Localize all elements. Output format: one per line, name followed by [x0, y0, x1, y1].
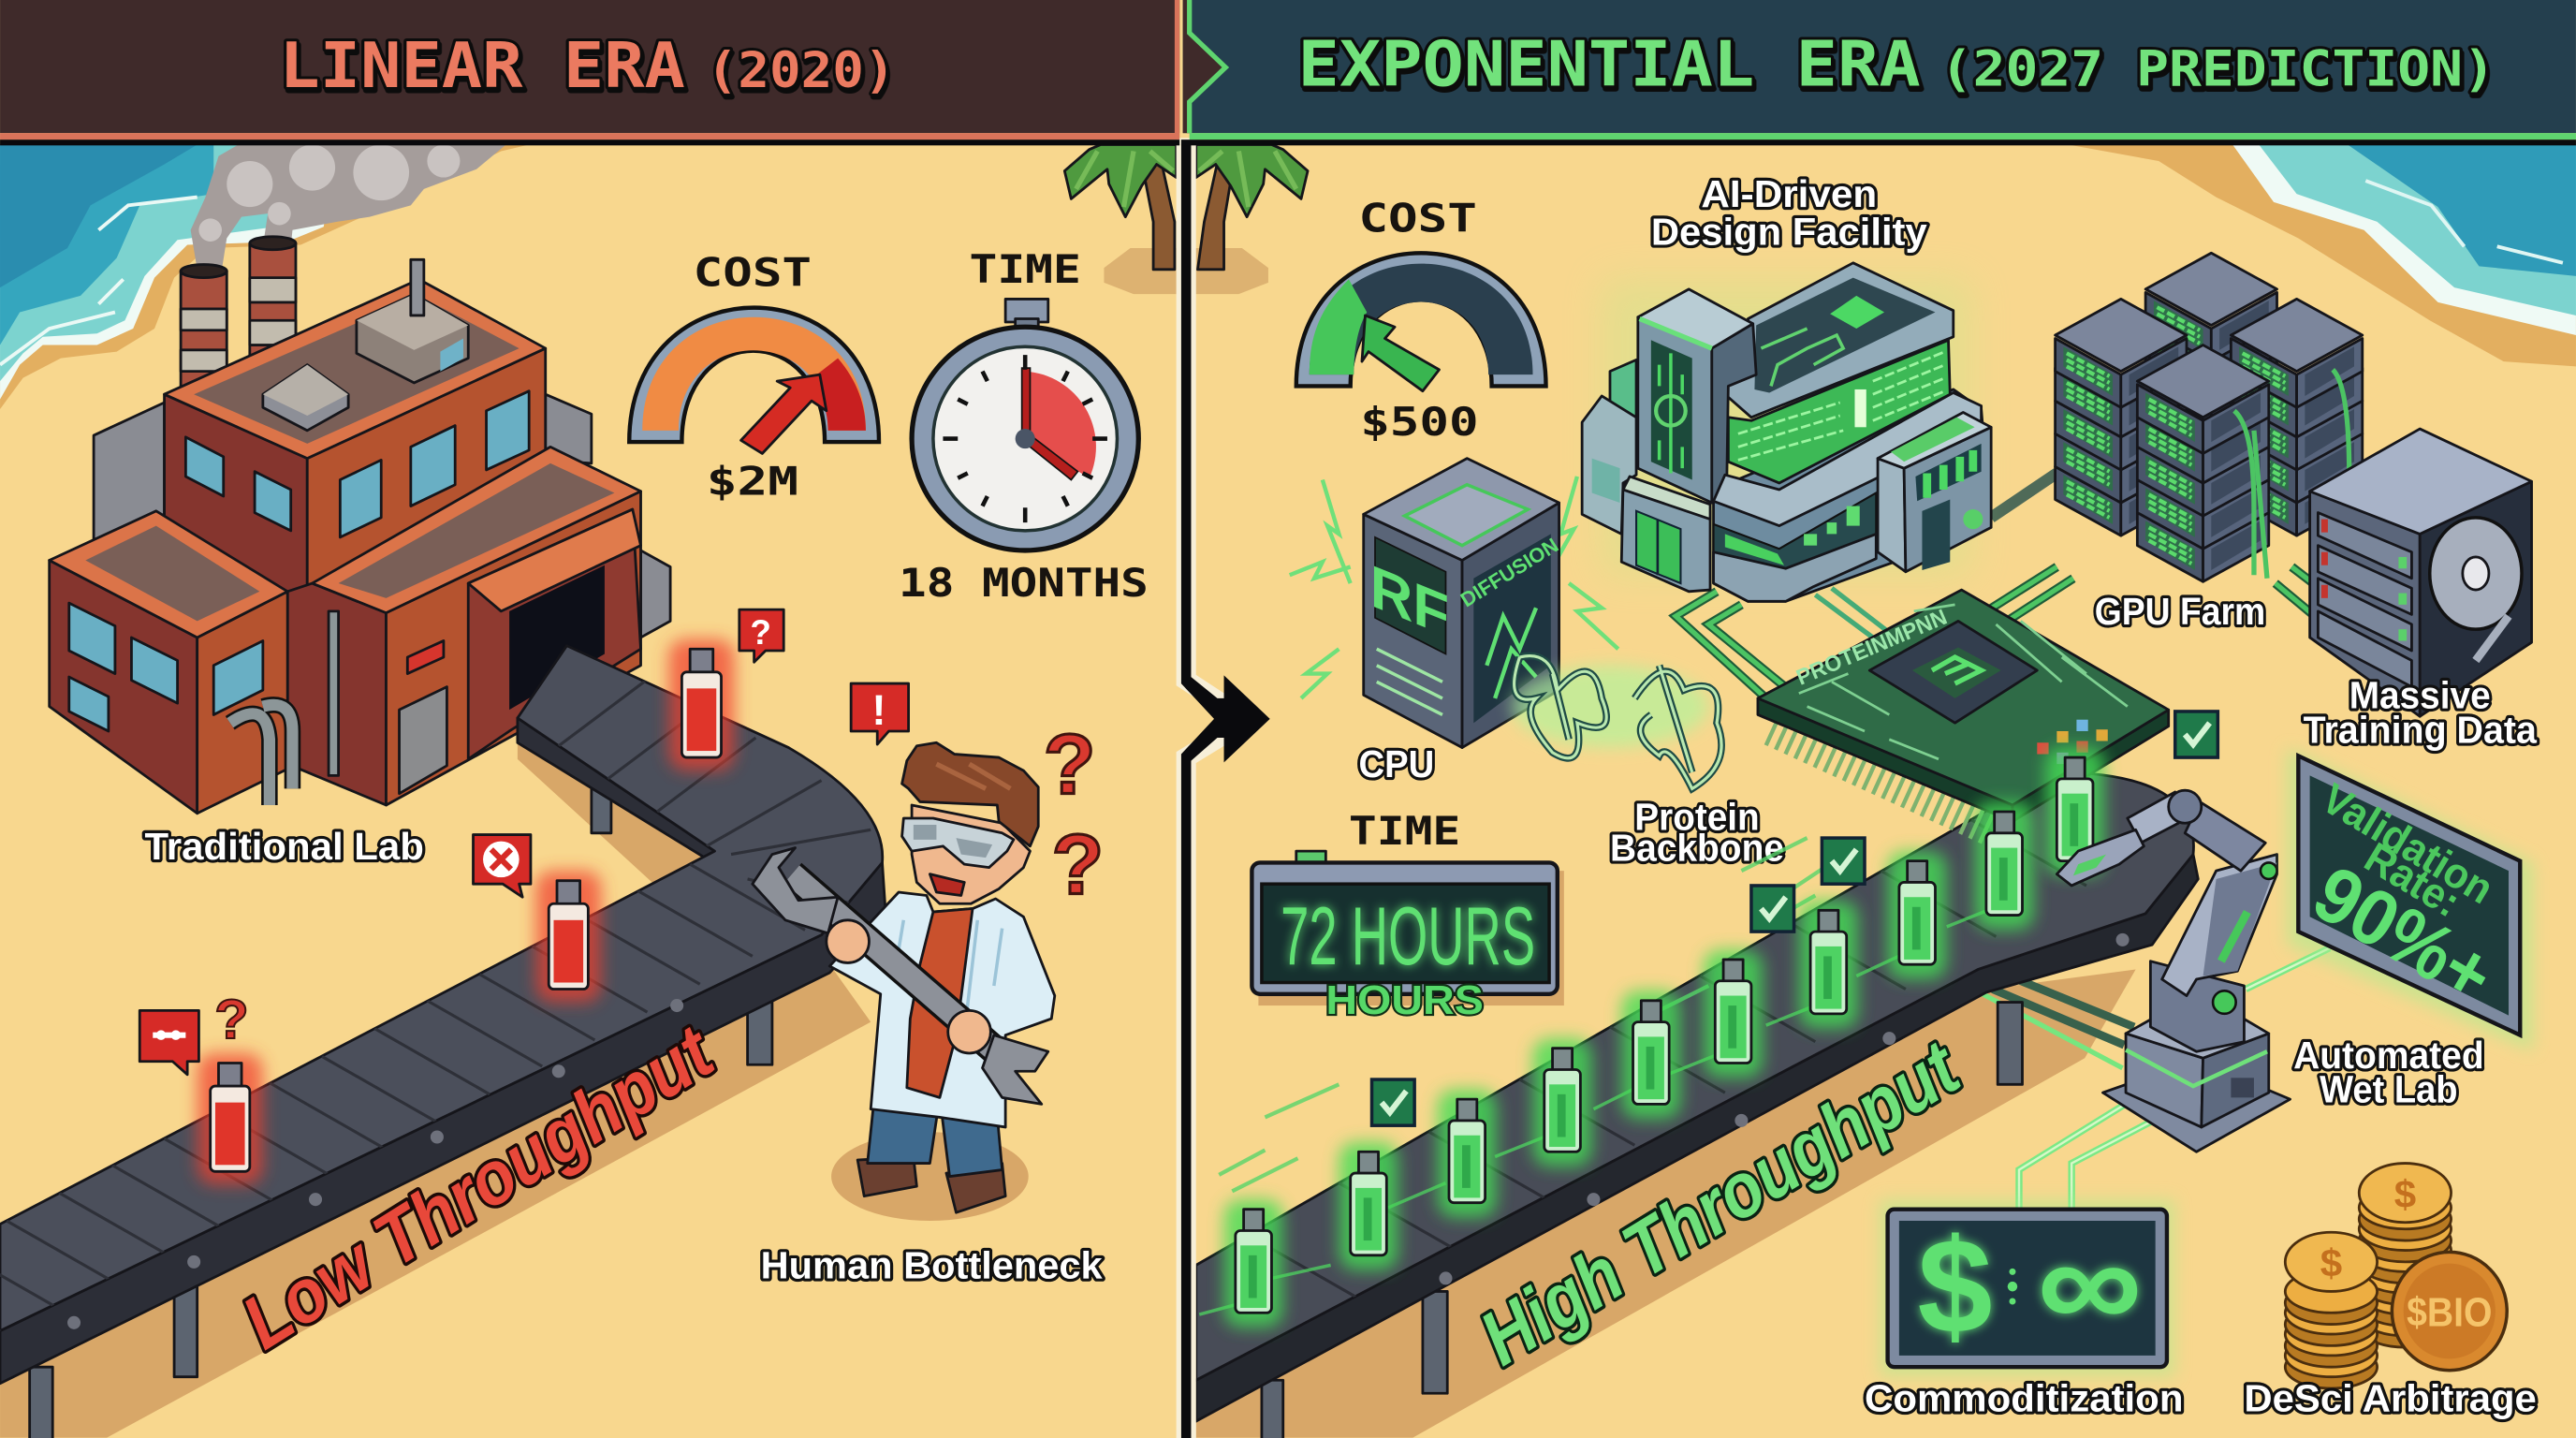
facility glass band — [1728, 340, 1950, 483]
roller door and sign — [400, 687, 446, 794]
high throughput label: High Throughput — [1466, 1023, 1976, 1382]
header: linear era: (2020) — [707, 42, 896, 99]
loading tunnel — [468, 509, 641, 759]
facility left wing — [1610, 360, 1636, 419]
validation rate panel: Validation — [2314, 774, 2502, 913]
conveyor legs — [30, 781, 772, 1438]
alert bubble exclamation: ! — [871, 686, 886, 734]
vial red 1 — [668, 639, 735, 770]
robot lower arm — [2162, 855, 2277, 996]
label: Massive Training Data — [2304, 673, 2537, 751]
robot upper arm — [2185, 801, 2265, 871]
question marks: ? — [1051, 817, 1104, 913]
protein backbone strands — [1512, 656, 1721, 788]
label: Traditional Lab: Traditional Lab — [145, 825, 424, 868]
small question mark: ? — [214, 988, 249, 1050]
wrench — [753, 848, 1048, 1104]
stopwatch — [899, 246, 1149, 606]
header: exponential era: EXPONENTIAL ERA — [1298, 27, 1921, 100]
conveyor legs — [1262, 1003, 2022, 1438]
validation rate panel — [2287, 748, 2533, 1051]
cost gauge left: $2M — [707, 458, 798, 504]
right panel scene — [1196, 473, 2341, 1438]
grey annexes — [94, 403, 165, 550]
label: CPU: CPU — [1358, 742, 1434, 785]
AI design facility — [1582, 263, 1991, 601]
lower left block — [50, 560, 198, 814]
robot gripper — [2056, 829, 2144, 886]
vial red 3 — [198, 1053, 263, 1184]
divider between panels — [1186, 138, 1224, 1438]
massive training data server — [2310, 429, 2532, 716]
scientist: Human Bottleneck — [753, 742, 1055, 1221]
alert bubble error — [474, 835, 531, 897]
vials green — [1224, 748, 2104, 1328]
robot pedestal — [2150, 961, 2244, 1051]
head — [912, 805, 1030, 903]
upper windows — [185, 391, 529, 537]
coins: DeSci arbitrage: $ — [2320, 1241, 2342, 1285]
label: GPU Farm: GPU Farm — [2095, 590, 2265, 633]
header: exponential era: (2027 PREDICTION) — [1940, 40, 2496, 97]
coins: DeSci arbitrage: $BIO — [2407, 1289, 2492, 1335]
factory: Traditional Lab — [50, 144, 670, 814]
label: Protein Backbone — [1610, 795, 1784, 870]
robot arm: automated wet lab — [2056, 790, 2291, 1152]
facility entrance — [1621, 483, 1710, 592]
check badges — [1372, 712, 2217, 1125]
coins: DeSci arbitrage: $ — [2394, 1172, 2416, 1216]
cost gauge right: $500 — [1360, 399, 1479, 445]
facility podium — [1714, 389, 1991, 601]
commoditization panel: $ — [1918, 1211, 1993, 1361]
commoditization panel: ∞ — [2037, 1212, 2143, 1356]
vial red 2 — [535, 871, 601, 1003]
speed lines — [1219, 838, 1832, 1191]
label: DeSci Arbitrage: DeSci Arbitrage — [2244, 1377, 2537, 1420]
label: Human Bottleneck: Human Bottleneck — [761, 1243, 1103, 1286]
header: linear era — [0, 0, 1179, 145]
timer display: HOURS — [1325, 977, 1484, 1023]
protein chip board — [1758, 590, 2169, 835]
CPU tower — [1364, 459, 1562, 748]
pipes — [230, 705, 292, 805]
cost gauge left: COST — [694, 249, 812, 295]
label: AI-Driven Design Facility — [1651, 172, 1927, 253]
belt shadow right — [1196, 969, 2136, 1438]
belt shadow left — [0, 740, 871, 1438]
upper block — [165, 394, 307, 608]
facility right block — [1878, 459, 1906, 572]
timer display — [1251, 808, 1564, 1023]
facility tower — [1638, 317, 1712, 503]
conveyor right — [1196, 772, 2198, 1438]
header: linear era: LINEAR ERA — [279, 29, 685, 102]
cost gauge left — [629, 249, 879, 504]
validation rate panel: 90%+ — [2299, 848, 2509, 1020]
arrow: transition — [1181, 144, 1270, 1438]
goggles — [902, 818, 1014, 868]
CPU tower: DIFFUSION — [1456, 534, 1562, 611]
chimneys — [181, 237, 296, 403]
lab coat — [829, 892, 1055, 1127]
facility roof — [1725, 263, 1954, 418]
facility ledge — [1714, 392, 1982, 526]
label: Commoditization: Commoditization — [1865, 1377, 2183, 1420]
ocean: right shore — [2069, 144, 2576, 366]
conveyor left — [0, 646, 887, 1438]
wet lab data lines — [1980, 948, 2330, 1212]
label: Protein Backbone: Protein — [1634, 795, 1760, 838]
facility mid band — [1714, 493, 1876, 568]
roof boxes — [357, 294, 468, 383]
commoditization panel — [1880, 1199, 2175, 1377]
header: exponential era — [1181, 0, 2576, 145]
question marks — [1044, 717, 1104, 913]
label: Automated Wet Lab — [2293, 1034, 2484, 1111]
label: AI-Driven Design Facility: Design Facility — [1651, 210, 1927, 253]
coins: DeSci arbitrage — [2285, 1164, 2507, 1388]
alert bubble blocked — [139, 1010, 198, 1075]
protein chip board: PROTEINMPNN — [1793, 605, 1951, 691]
palm tree left — [1064, 144, 1177, 294]
question marks: ? — [1044, 717, 1095, 813]
CPU tower: RF — [1370, 552, 1449, 650]
label: Automated Wet Lab: Wet Lab — [2320, 1068, 2458, 1111]
circuit traces — [1676, 473, 2341, 698]
label: AI-Driven Design Facility: AI-Driven — [1701, 172, 1877, 215]
palm tree right — [1196, 144, 1308, 294]
alert bubble question: ? — [750, 613, 771, 652]
ocean: left shore — [0, 144, 529, 409]
alert bubble exclamation — [851, 683, 909, 744]
energy sparks around CPU — [1290, 477, 1618, 698]
cost gauge right: COST — [1358, 195, 1477, 241]
stopwatch: TIME — [970, 246, 1081, 292]
GPU farm — [2056, 253, 2363, 581]
label: Massive Training Data: Massive — [2349, 673, 2491, 716]
smoke plume — [191, 144, 506, 270]
label: Massive Training Data: Training Data — [2304, 708, 2537, 751]
timer display: TIME — [1349, 808, 1460, 854]
label: Automated Wet Lab: Automated — [2293, 1034, 2484, 1077]
timer display: 72 HOURS — [1281, 890, 1535, 982]
cost gauge right — [1296, 195, 1546, 445]
stopwatch: 18 MONTHS — [899, 560, 1149, 606]
label: Protein Backbone: Backbone — [1610, 827, 1784, 870]
validation rate panel: Rate: — [2357, 833, 2468, 927]
lower right section — [287, 583, 386, 805]
low throughput label: Low Throughput — [228, 1009, 729, 1366]
alert bubble question — [739, 609, 783, 662]
